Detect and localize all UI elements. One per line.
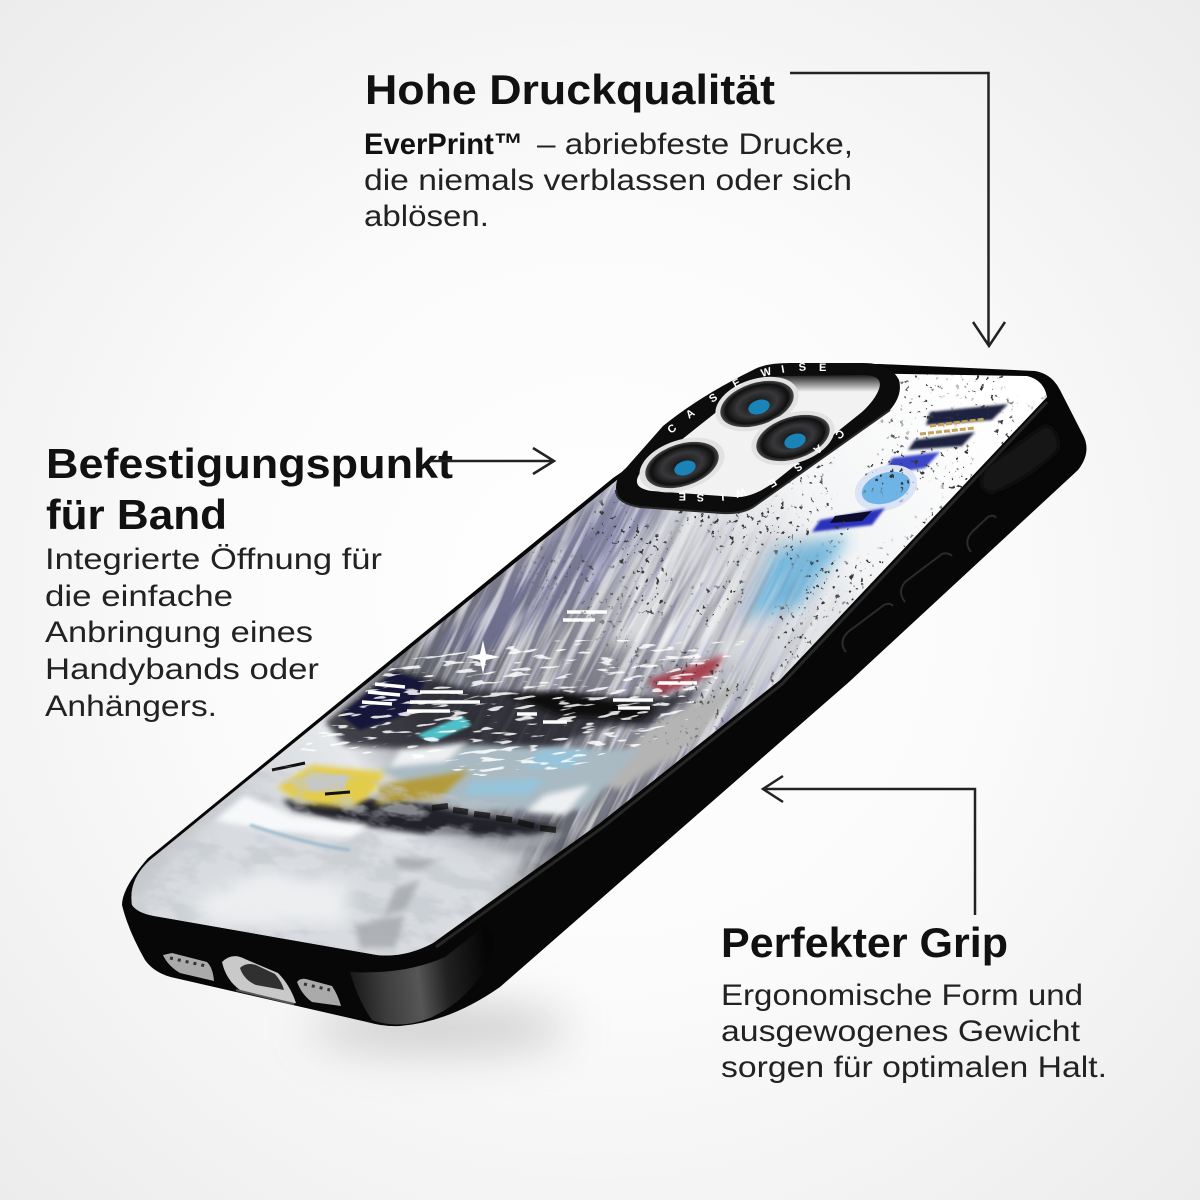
light grey mid area — [599, 536, 804, 658]
body: Integrierte Öffnung für — [45, 543, 382, 576]
road lettering scribble — [432, 806, 556, 830]
text block: Hohe Druckqualität — [364, 66, 853, 233]
foreground highlights — [215, 795, 370, 838]
taxi shadow — [282, 797, 560, 838]
blue stroke — [250, 825, 350, 850]
body — [721, 979, 1107, 1084]
body: – abriebfeste Drucke, — [537, 128, 853, 161]
text block: Befestigungspunkt — [45, 440, 453, 723]
heading: Perfekter Grip — [721, 919, 1008, 966]
body: Ergonomische Form und — [721, 979, 1083, 1012]
camera island — [616, 361, 900, 513]
city dark band — [325, 668, 700, 760]
body: Anbringung eines — [45, 616, 313, 649]
blue sign — [812, 452, 940, 532]
ring bevel — [616, 410, 890, 513]
streak textures — [386, 480, 823, 879]
charging port — [222, 956, 296, 1004]
city lights — [300, 640, 744, 776]
phone shadow — [310, 1002, 570, 1054]
arrow: print quality — [790, 73, 1005, 346]
ring brand text top: CASEWISE — [665, 361, 826, 436]
body — [45, 543, 382, 723]
side rim highlight — [436, 402, 1047, 947]
heading: Befestigungspunkt — [46, 440, 453, 487]
foreground texture — [132, 766, 556, 956]
body: Anhängers. — [45, 690, 217, 723]
body: EverPrint™ — [364, 128, 523, 161]
ring brand text bottom: CASEWISE — [679, 427, 846, 503]
red sign — [648, 655, 725, 695]
blue street panels — [465, 750, 590, 795]
body — [364, 128, 853, 233]
speaker grille left — [163, 953, 214, 981]
arrow: grip — [763, 776, 975, 915]
speaker grille right — [297, 979, 341, 1006]
printed back artwork — [131, 374, 1047, 956]
purple skyline zone — [430, 478, 670, 650]
foreground grey patches — [355, 833, 565, 948]
camera glass — [637, 375, 880, 497]
star glint — [466, 640, 500, 674]
navy plaque — [908, 404, 1008, 450]
body: Handybands oder — [45, 653, 319, 686]
arrow: strap point — [430, 448, 554, 474]
case silhouette — [122, 364, 1087, 1026]
heading: Hohe Druckqualität — [365, 66, 775, 113]
body: ablösen. — [364, 200, 489, 233]
body: die einfache — [45, 580, 233, 613]
phone case — [122, 364, 1087, 1026]
body: ausgewogenes Gewicht — [721, 1015, 1081, 1048]
camera ring — [616, 363, 900, 513]
white street panels — [390, 742, 590, 815]
body: sorgen für optimalen Halt. — [721, 1051, 1107, 1084]
side buttons — [842, 516, 996, 652]
snowy foreground — [131, 800, 532, 956]
street — [380, 745, 640, 810]
corner gloss — [350, 925, 494, 1025]
heading: für Band — [46, 491, 227, 538]
text block: Perfekter Grip — [721, 919, 1107, 1084]
grey-tan edge — [606, 682, 742, 792]
lens right — [744, 401, 842, 475]
dark roofline — [505, 692, 655, 720]
ink splatter — [511, 374, 1046, 750]
building window bars — [362, 612, 697, 722]
lens left — [632, 428, 732, 502]
lens top — [708, 367, 806, 441]
teal building — [417, 716, 472, 742]
heading — [46, 440, 453, 538]
yellow taxi — [272, 763, 470, 808]
body: die niemals verblassen oder sich — [364, 164, 852, 197]
navy block — [340, 672, 425, 730]
side bump — [981, 425, 1058, 493]
blue signage glow — [745, 535, 850, 620]
